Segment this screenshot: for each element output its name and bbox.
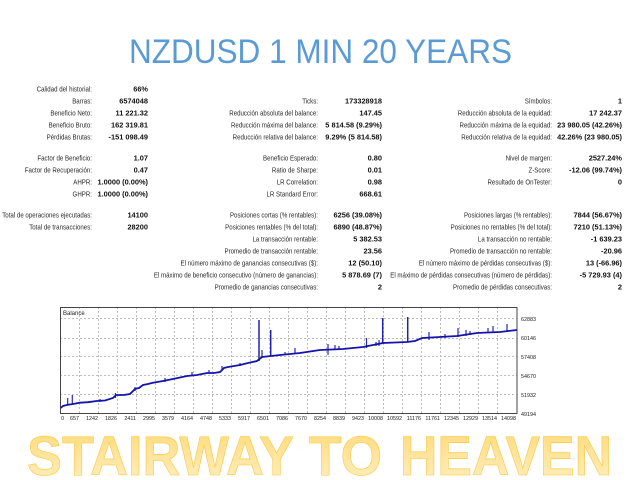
x axis labels: 2411 [124,416,136,422]
values: column 3: 2 [618,282,622,292]
values: column 2: 6256 (39.08%) [334,210,383,220]
x axis labels: 8254 [314,416,326,422]
labels: column 3: Reducción relativa de la equidad: [461,134,552,142]
labels: column 2: El número máximo de ganancias consecutivas ($): [180,260,318,268]
labels: column 3: Promedio de pérdidas consecutivas: [453,284,552,292]
values: column 3 [557,96,623,292]
values: column 3: 7210 (51.13%) [574,222,623,232]
labels: column 1: Factor de Recuperación: [25,167,92,175]
labels: column 1: Calidad del historial: [37,86,92,94]
labels: column 2: Posiciones cortas (% rentables): [230,212,318,220]
values: column 1: 1.0000 (0.00%) [97,190,149,198]
values: column 1: 11 221.32 [116,108,148,118]
labels: column 1: Total de transacciones: [29,224,92,232]
values: column 3: -1 639.23 [591,234,622,244]
panel: statistics column 2 [154,96,383,292]
balance line [61,330,517,408]
values: column 2: 12 (50.10) [348,258,383,268]
x axis labels: 7086 [276,416,288,422]
y axis labels: 54670 [521,374,536,380]
values: column 1: 1.07 [134,154,148,162]
balance legend: Balance [63,311,85,317]
labels: column 3: Posiciones largas (% rentables): [464,212,552,220]
labels: column 3: Promedio de transacción no rentable: [450,248,552,256]
values: column 2: 5 814.58 (9.29%) [325,120,383,130]
values: column 2: 0.98 [368,178,382,186]
labels: column 1: GHPR: [73,191,92,199]
values: column 1: 66% [133,84,148,94]
labels: column 2: Promedio de ganancias consecutivas: [215,284,318,292]
panel: statistics column 1 [2,84,149,232]
values: column 3: -20.96 [601,246,622,256]
x axis labels: 11176 [407,416,421,422]
labels: column 2: La transacción rentable: [252,236,318,244]
tall balance spikes [259,317,408,361]
values: column 3: -12.06 (99.74%) [569,166,623,174]
y axis labels [521,317,536,418]
x axis labels: 10008 [368,416,383,422]
slogan [27,424,612,480]
labels: column 2: LR Standard Error: [266,191,318,199]
values: column 3: 23 980.05 (42.26%) [557,120,623,130]
labels: column 3: Z-Score: [528,167,552,175]
x axis labels: 12929 [463,416,478,422]
values: column 1: 1.0000 (0.00%) [97,178,149,186]
values: column 2: 9.29% (5 814.58) [325,132,383,142]
x axis labels [61,416,516,422]
labels: column 2: Beneficio Esperado: [263,155,318,163]
x axis labels: 2995 [143,416,155,422]
y axis labels: 49194 [521,412,536,418]
labels: column 3: La transacción no rentable: [478,236,552,244]
labels: column 3: El número máximo de pérdidas consecutivas ($): [419,260,552,268]
x axis labels: 7670 [295,416,307,422]
x axis labels: 5917 [238,416,250,422]
labels: column 2: Reducción máxima del balance: [231,122,318,130]
x axis labels: 5333 [219,416,231,422]
y axis labels: 57408 [521,355,536,361]
labels: column 3: El máximo de pérdidas consecutivas (número de pérdidas): [390,272,552,280]
labels: column 2: LR Correlation: [277,179,318,187]
x axis labels: 8839 [333,416,345,422]
labels: column 3 [390,98,552,292]
x axis labels: 4164 [181,416,193,422]
labels: column 2: Ticks: [302,98,318,106]
labels: column 3: Símbolos: [525,98,552,106]
y axis labels: 60146 [521,336,536,342]
x axis labels: 3579 [162,416,174,422]
values: column 2 [325,96,383,292]
labels: column 1: AHPR: [73,179,92,187]
values: column 1: 162 319.81 [111,120,148,130]
values: column 3: 42.26% (23 980.05) [557,132,623,142]
values: column 3: 0 [618,178,622,186]
x axis labels: 11761 [425,416,440,422]
labels: column 1: Barras: [72,98,92,106]
y axis labels: 51932 [521,393,536,399]
values: column 1: 28200 [127,222,148,232]
values: column 1: 14100 [127,210,148,220]
labels: column 3: Posiciones no rentables (% del total): [451,224,552,232]
values: column 1: 0.47 [134,166,148,174]
values: column 2: 173328918 [345,96,382,106]
values: column 2: 668.61 [359,190,382,198]
values: column 3: 17 242.37 [589,108,622,118]
x axis labels: 4748 [200,416,212,422]
x axis labels: 9423 [352,416,364,422]
values: column 1 [97,84,149,232]
labels: column 3: Resultado de OnTester: [487,179,552,187]
x axis labels: 13514 [482,416,497,422]
x axis labels: 12345 [444,416,459,422]
x axis labels: 6501 [257,416,269,422]
values: column 2: 2 [378,282,382,292]
values: column 3: 7844 (56.67%) [574,210,623,220]
labels: column 2: Reducción relativa del balance: [233,134,318,142]
labels: column 2: Reducción absoluta del balance: [229,110,318,118]
labels: column 2: El máximo de beneficio consecutivo (número de ganancias): [154,272,318,280]
x axis labels: 1826 [105,416,117,422]
x axis labels: 14098 [501,416,516,422]
y axis labels: 62883 [521,317,536,323]
balance spikes [68,324,507,405]
values: column 3: 13 (-66.96) [586,258,623,268]
values: column 3: -5 729.93 (4) [580,270,623,280]
x axis labels: 657 [70,416,79,422]
labels: column 2: Ratio de Sharpe: [272,167,318,175]
values: column 2: 5 382.53 [353,234,382,244]
labels: column 1: Beneficio Neto: [50,110,92,118]
labels: column 3: Nivel de margen: [506,155,552,163]
x axis labels: 10592 [387,416,402,422]
labels: column 1: Beneficio Bruto: [49,122,92,130]
values: column 1: 6574048 [119,96,148,106]
values: column 2: 23.56 [364,246,382,256]
labels: column 2: Promedio de transacción rentable: [224,248,318,256]
values: column 2: 5 878.69 (7) [342,270,383,280]
labels: column 1: Pérdidas Brutas: [47,134,92,142]
labels: column 2 [154,98,318,292]
values: column 2: 0.80 [368,154,382,162]
balance chart [60,307,536,422]
labels: column 3: Reducción absoluta de la equidad: [458,110,552,118]
labels: column 1: Factor de Beneficio: [37,155,92,163]
values: column 3: 1 [618,96,622,106]
values: column 3: 2527.24% [589,154,622,162]
title: NZDUSD 1 MIN 20 YEARS [129,33,512,71]
x axis labels: 1242 [86,416,98,422]
values: column 1: -151 098.49 [109,132,148,142]
x axis labels: 0 [61,416,64,422]
values: column 2: 6890 (48.87%) [334,222,383,232]
labels: column 3: Reducción máxima de la equidad: [460,122,552,130]
labels: column 2: Posiciones rentables (% del total): [225,224,318,232]
values: column 2: 0.01 [368,166,382,174]
values: column 2: 147.45 [359,108,382,118]
labels: column 1: Total de operaciones ejecutadas: [2,212,92,220]
labels: column 1 [2,86,92,232]
panel: statistics column 3 [390,96,623,292]
chart frame [60,308,517,414]
